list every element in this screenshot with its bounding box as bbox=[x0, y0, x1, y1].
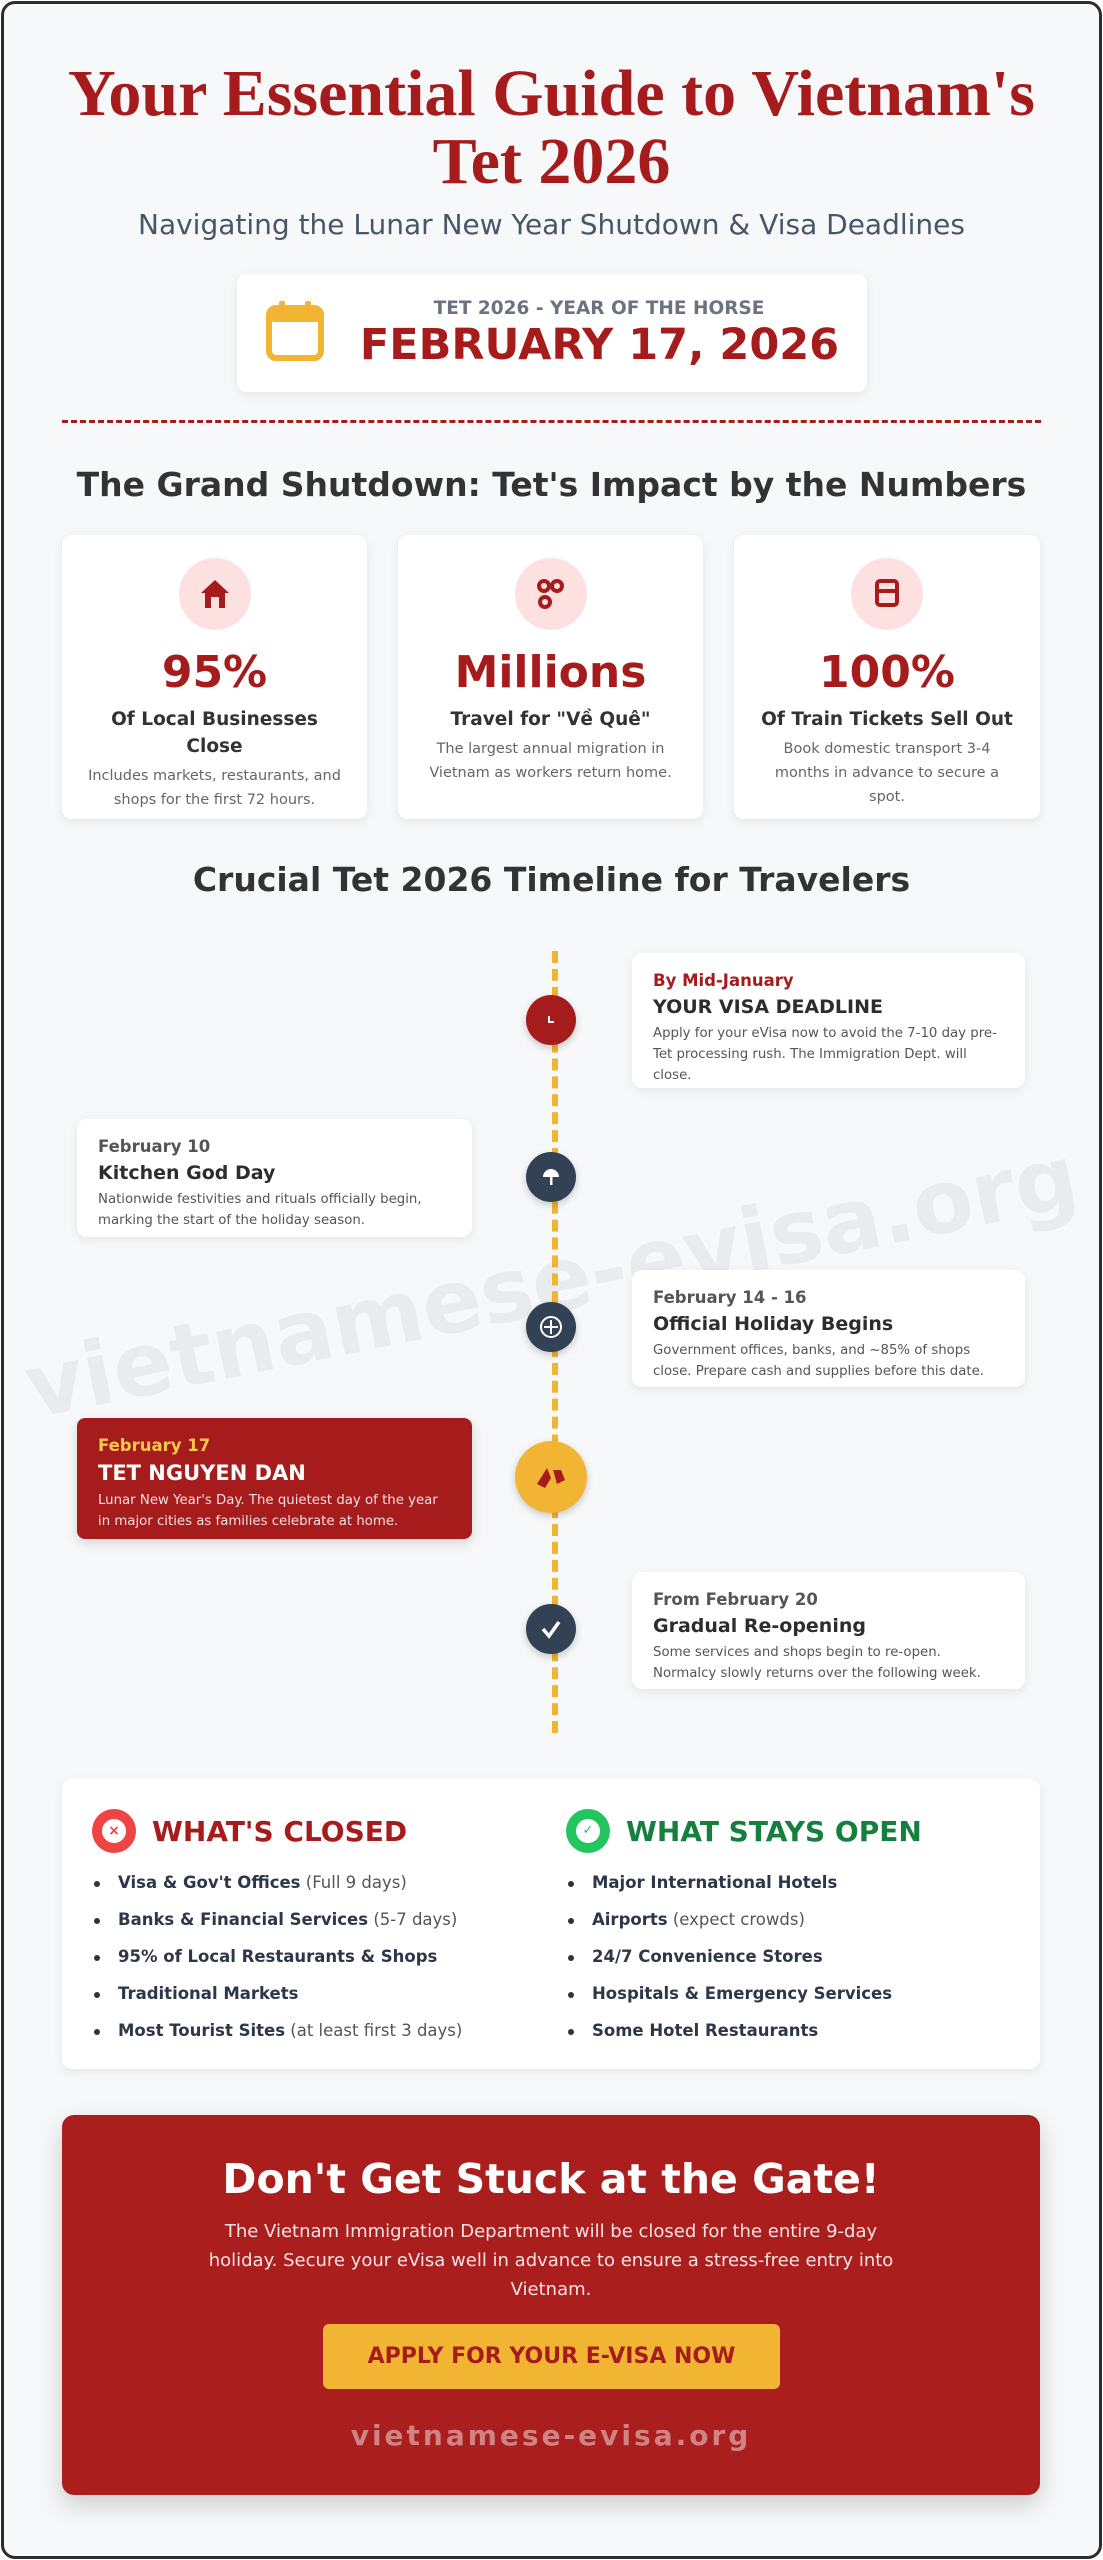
footer url: vietnamese-evisa.org bbox=[351, 2419, 751, 2452]
column: closed: Visa & Gov't Offices (Full 9 days) bbox=[118, 1873, 407, 1892]
icon: ritual bbox=[526, 1152, 576, 1202]
panel: stat millions: Travel for "Về Quê" bbox=[451, 709, 650, 730]
column: open: Hospitals & Emergency Services bbox=[592, 1984, 892, 2003]
timeline line bbox=[552, 951, 558, 1733]
panel: stat 100% bbox=[734, 535, 1040, 819]
panel: stat 95%: Includes markets, restaurants, and shops for the first 72 hours. bbox=[88, 768, 341, 808]
heading: closed: WHAT'S CLOSED bbox=[152, 1814, 407, 1848]
column: open: Airports (expect crowds) bbox=[592, 1910, 805, 1929]
watermark: vietnamese-evisa.org bbox=[17, 1124, 1086, 1439]
icon: clock bbox=[526, 995, 576, 1045]
timeline item 4: February 17 bbox=[98, 1436, 210, 1455]
timeline item 3: Official Holiday Begins bbox=[653, 1313, 893, 1335]
title: Your Essential Guide to Vietnam's bbox=[68, 57, 1035, 130]
timeline item 5 bbox=[632, 1572, 1025, 1689]
timeline item 1: By Mid-January bbox=[653, 971, 794, 990]
icon: celebration bbox=[515, 1441, 587, 1513]
title bbox=[68, 57, 1035, 198]
title: Tet 2026 bbox=[433, 125, 670, 198]
timeline item 1: YOUR VISA DEADLINE bbox=[653, 996, 883, 1018]
panel: stat millions bbox=[398, 535, 703, 819]
column: closed: 95% of Local Restaurants & Shops bbox=[118, 1947, 437, 1966]
icon: people bbox=[514, 558, 586, 630]
column: closed: Most Tourist Sites (at least first 3 days) bbox=[118, 2021, 462, 2040]
heading: closed: × bbox=[108, 1823, 120, 1839]
subtitle: Navigating the Lunar New Year Shutdown & Visa Deadlines bbox=[138, 208, 965, 241]
date: FEBRUARY 17, 2026 bbox=[360, 320, 839, 370]
timeline item 4 bbox=[77, 1418, 472, 1539]
heading: open: ✓ bbox=[583, 1823, 593, 1838]
column: open: Some Hotel Restaurants bbox=[592, 2021, 818, 2040]
timeline item 3: February 14 - 16 bbox=[653, 1288, 807, 1307]
icon: calendar bbox=[266, 301, 324, 361]
heading: timeline: Crucial Tet 2026 Timeline for Travelers bbox=[193, 860, 910, 899]
heading: numbers: The Grand Shutdown: Tet's Impact by the Numbers bbox=[77, 465, 1026, 504]
column: open bbox=[566, 1809, 922, 2040]
panel: stat 95% bbox=[62, 535, 367, 819]
cta heading: Don't Get Stuck at the Gate! bbox=[222, 2155, 880, 2203]
column: closed: Traditional Markets bbox=[118, 1984, 298, 2003]
timeline item 2: Nationwide festivities and rituals officially begin, marking the start of the holiday season. bbox=[98, 1192, 422, 1228]
panel: stat millions: The largest annual migration in Vietnam as workers return home. bbox=[429, 741, 672, 781]
timeline item 1 bbox=[632, 953, 1025, 1088]
timeline item 3: Government offices, banks, and ~85% of shops close. Prepare cash and supplies before this date. bbox=[653, 1343, 984, 1379]
panel: stat 100%: Of Train Tickets Sell Out bbox=[761, 709, 1013, 730]
timeline item 5: Some services and shops begin to re-open. Normalcy slowly returns over the following week. bbox=[653, 1645, 981, 1681]
column: closed bbox=[92, 1809, 462, 2040]
column: closed: Banks & Financial Services (5-7 days) bbox=[118, 1910, 457, 1929]
panel: stat 100%: Book domestic transport 3-4 months in advance to secure a spot. bbox=[775, 741, 999, 805]
panel: stat 95%: 95% bbox=[162, 647, 267, 698]
timeline item 4: TET NGUYEN DAN bbox=[98, 1461, 306, 1485]
cta text: The Vietnam Immigration Department will be closed for the entire 9-day holiday. Secure your eVisa well in advance to ensure a stress-free entry into Vietnam. bbox=[209, 2221, 893, 2300]
timeline item 4: Lunar New Year's Day. The quietest day of the year in major cities as families celebrate at home. bbox=[98, 1493, 438, 1529]
icon: train bbox=[851, 558, 923, 630]
timeline item 3 bbox=[632, 1270, 1025, 1387]
cta button bbox=[323, 2324, 780, 2389]
timeline item 2 bbox=[77, 1119, 472, 1237]
icon: house bbox=[178, 558, 250, 630]
panel: stat millions: Millions bbox=[455, 647, 646, 698]
panel: call to action bbox=[62, 2115, 1040, 2495]
heading: open: WHAT STAYS OPEN bbox=[626, 1814, 922, 1848]
timeline item 1: Apply for your eVisa now to avoid the 7-10 day pre-Tet processing rush. The Immigration Dept. will close. bbox=[653, 1026, 997, 1083]
heading: open bbox=[566, 1809, 922, 1853]
panel: closed vs open bbox=[62, 1779, 1040, 2069]
heading: closed bbox=[92, 1809, 407, 1853]
cta button: APPLY FOR YOUR E-VISA NOW bbox=[368, 2344, 735, 2369]
timeline item 5: Gradual Re-opening bbox=[653, 1615, 866, 1637]
panel: stat 95%: Of Local Businesses Close bbox=[111, 709, 318, 757]
date box bbox=[237, 274, 867, 392]
timeline item 5: From February 20 bbox=[653, 1590, 818, 1609]
timeline item 2: Kitchen God Day bbox=[98, 1162, 275, 1184]
column: open: Major International Hotels bbox=[592, 1873, 837, 1892]
timeline item 2: February 10 bbox=[98, 1137, 210, 1156]
panel: stat 100%: 100% bbox=[819, 647, 955, 698]
icon: plus circle bbox=[526, 1302, 576, 1352]
icon: check bbox=[526, 1604, 576, 1654]
date label: TET 2026 - YEAR OF THE HORSE bbox=[434, 298, 764, 319]
column: open: 24/7 Convenience Stores bbox=[592, 1947, 823, 1966]
